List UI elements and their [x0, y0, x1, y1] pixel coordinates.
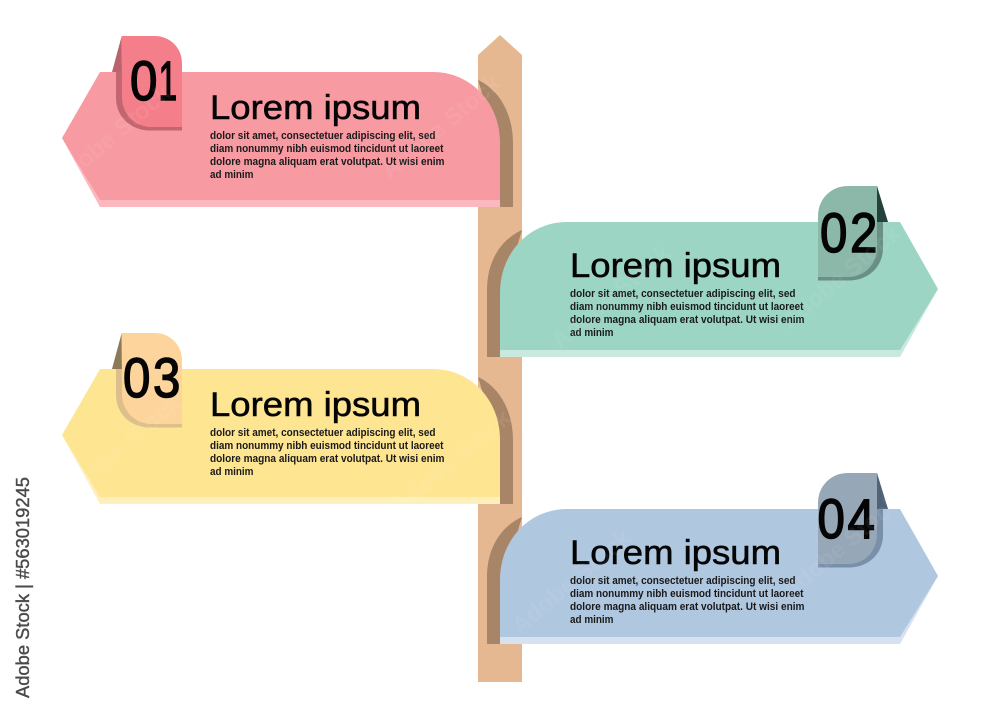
- banner lower edge: [500, 576, 938, 644]
- panel: 03: [62, 333, 513, 504]
- number: 02: [820, 202, 880, 265]
- tab shadow: [818, 509, 883, 568]
- banner body: [500, 509, 938, 637]
- body text: dolor sit amet, consectetuer adipiscing elit, sed: [210, 130, 436, 142]
- number: 04: [818, 488, 878, 551]
- heading: Lorem ipsum: [210, 386, 421, 424]
- body text: diam nonummy nibh euismod tincidunt ut laoreet: [570, 301, 804, 313]
- banner shadow on pole: [478, 80, 513, 207]
- body text: dolore magna aliquam erat volutpat. Ut wisi enim: [570, 314, 805, 326]
- tab shadow: [818, 222, 883, 280]
- body text: ad minim: [210, 169, 254, 181]
- banner shadow on pole: [487, 517, 522, 644]
- body text: [570, 288, 805, 339]
- body text: [210, 427, 445, 478]
- watermarks: Adobe Stock: [387, 404, 517, 520]
- body text: ad minim: [570, 614, 614, 626]
- body text: dolor sit amet, consectetuer adipiscing elit, sed: [570, 575, 796, 587]
- body text: ad minim: [570, 327, 614, 339]
- watermarks: Adobe Stock: [47, 79, 177, 195]
- tab shadow: [116, 72, 182, 130]
- watermarks: [47, 69, 907, 640]
- body text: dolor sit amet, consectetuer adipiscing elit, sed: [570, 288, 796, 300]
- tab fold: [877, 473, 888, 509]
- body text: diam nonummy nibh euismod tincidunt ut laoreet: [210, 440, 444, 452]
- tab fold: [112, 333, 122, 369]
- heading: Lorem ipsum: [570, 534, 781, 572]
- watermarks: Adobe Stock: [777, 219, 907, 335]
- watermarks: Adobe Stock: [507, 524, 637, 640]
- banner lower edge: [62, 435, 500, 504]
- body text: dolore magna aliquam erat volutpat. Ut wisi enim: [210, 453, 445, 465]
- stock credit: Adobe Stock | #563019245: [13, 477, 33, 698]
- watermarks: Adobe Stock: [547, 239, 677, 355]
- banner body: [500, 222, 938, 350]
- body text: dolore magna aliquam erat volutpat. Ut wisi enim: [570, 601, 805, 613]
- watermarks: Adobe Stock: [777, 489, 907, 605]
- tab fold: [877, 186, 888, 222]
- tab face: [122, 36, 182, 127]
- watermarks: Adobe Stock: [57, 389, 187, 505]
- body text: dolor sit amet, consectetuer adipiscing elit, sed: [210, 427, 436, 439]
- banner shadow on pole: [487, 230, 522, 357]
- tab fold: [112, 36, 122, 72]
- body text: dolore magna aliquam erat volutpat. Ut wisi enim: [210, 156, 445, 168]
- body text: [570, 575, 805, 626]
- number: 03: [123, 347, 183, 410]
- banner body: [62, 369, 500, 497]
- body text: ad minim: [210, 466, 254, 478]
- body text: [210, 130, 445, 181]
- tab face: [122, 333, 182, 424]
- panel: 02: [487, 186, 938, 357]
- banner lower edge: [62, 138, 500, 207]
- heading: Lorem ipsum: [210, 89, 421, 127]
- number: [130, 49, 179, 113]
- tab face: [818, 473, 877, 564]
- banner body: [62, 72, 500, 200]
- signpost pole: [478, 35, 522, 682]
- panel: 01: [62, 36, 513, 207]
- banner shadow on pole: [478, 377, 513, 504]
- body text: diam nonummy nibh euismod tincidunt ut laoreet: [570, 588, 804, 600]
- banner lower edge: [500, 289, 938, 357]
- number: 0: [130, 50, 160, 113]
- tab face: [818, 186, 877, 277]
- watermarks: Adobe Stock: [377, 69, 507, 185]
- heading: Lorem ipsum: [570, 247, 781, 285]
- body text: diam nonummy nibh euismod tincidunt ut laoreet: [210, 143, 444, 155]
- panel: 04: [487, 473, 938, 644]
- number: 1: [158, 49, 179, 112]
- tab shadow: [116, 369, 182, 428]
